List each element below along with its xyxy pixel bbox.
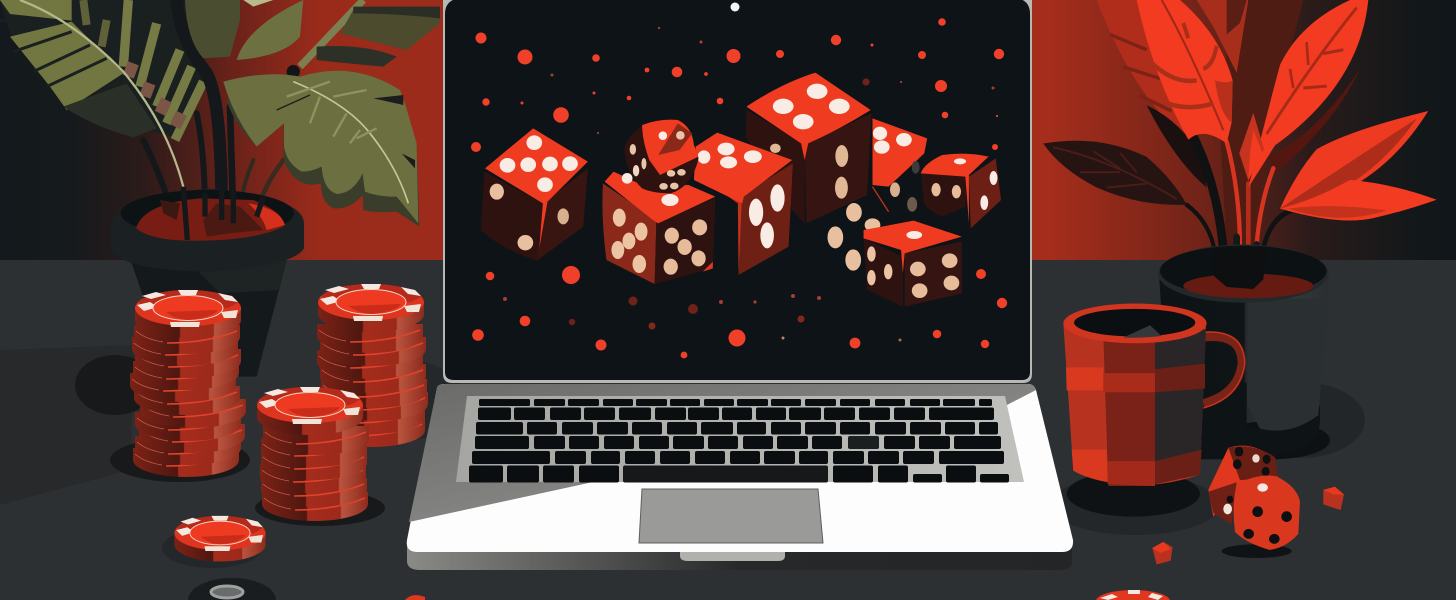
left die	[481, 128, 588, 261]
chip stack: left	[130, 290, 246, 477]
right pot	[1158, 245, 1330, 459]
bright main leaf	[1137, 0, 1233, 144]
black chip at bottom edge	[188, 578, 276, 600]
right plant	[1043, 0, 1437, 564]
chip stack: front	[257, 387, 369, 521]
top centre leaves	[185, 0, 440, 78]
red shards	[1152, 487, 1344, 564]
small dice	[1208, 446, 1300, 558]
laptop	[407, 0, 1073, 570]
right lower leaves	[1280, 111, 1437, 220]
background dots	[471, 18, 1007, 358]
stems	[143, 0, 283, 220]
keyboard	[456, 396, 1024, 482]
red shard at bottom edge	[405, 595, 425, 600]
loose pips	[827, 203, 880, 271]
table shadows	[0, 345, 1365, 568]
dice cluster	[481, 73, 1001, 307]
single chip on table	[174, 516, 266, 562]
laptop base	[407, 384, 1073, 570]
large top die	[746, 73, 871, 223]
large right leaf	[223, 71, 419, 227]
chip stack: right	[317, 284, 428, 447]
trackpad	[639, 489, 823, 543]
lower right die	[864, 221, 962, 307]
right upper leaf	[1239, 0, 1368, 188]
middle die	[694, 133, 793, 275]
red chip at bottom edge	[1096, 590, 1170, 600]
mug	[1063, 303, 1245, 517]
table surface	[0, 260, 1456, 600]
right small die	[921, 154, 1001, 228]
frond midrib	[20, 0, 187, 240]
laptop screen	[443, 0, 1032, 383]
wall background	[0, 0, 1456, 262]
frond leaf	[0, 0, 207, 140]
back leaves	[1097, 0, 1360, 249]
left plant	[0, 0, 440, 377]
dark left leaf	[1043, 141, 1187, 205]
front die with fives	[602, 172, 715, 284]
stems	[1187, 130, 1292, 268]
camera	[730, 2, 740, 12]
back die	[872, 118, 927, 212]
small tumbling die	[624, 119, 699, 193]
left pot	[111, 187, 304, 377]
